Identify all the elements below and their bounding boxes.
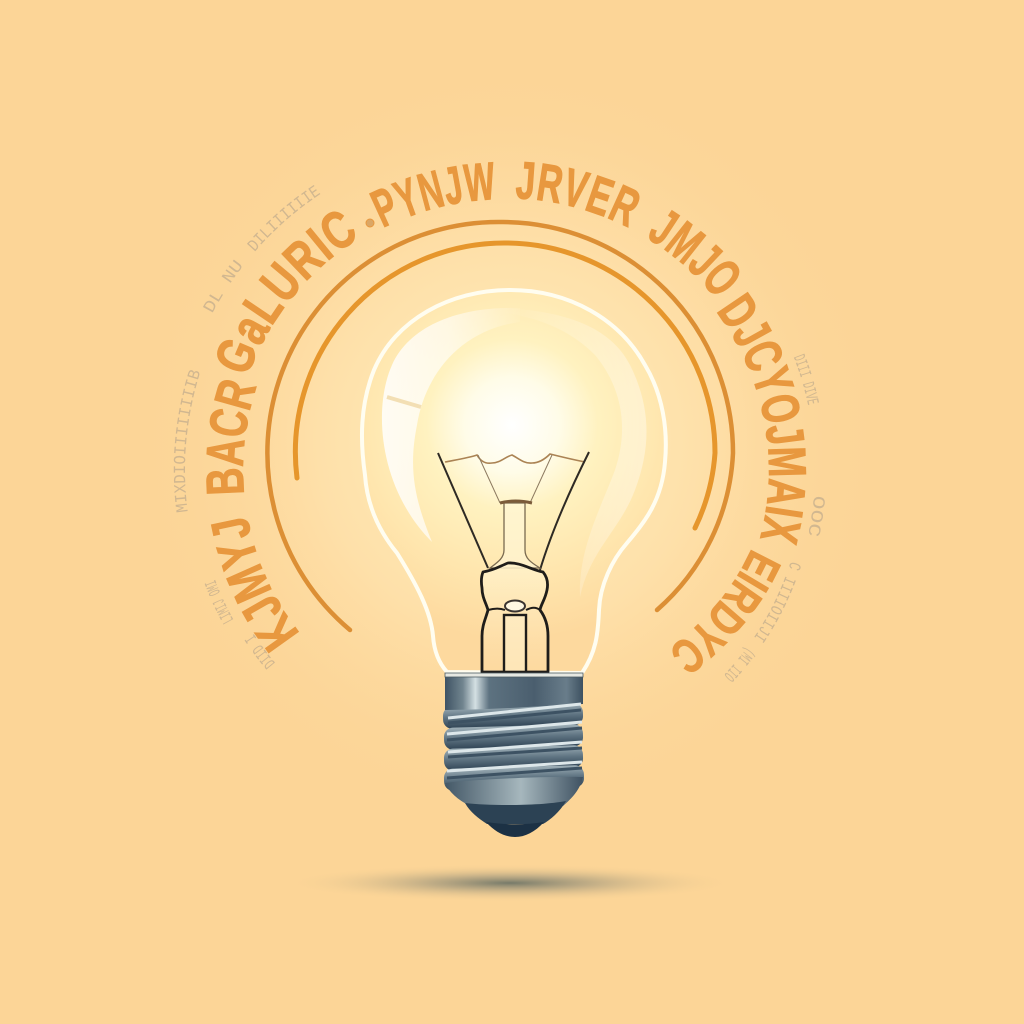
caption: upper left 1: DL NU: [203, 260, 242, 312]
caption: right lower 2: (MI IIO: [725, 647, 756, 682]
mount centre column: [504, 615, 526, 672]
lower contact: [465, 801, 566, 824]
left crescent highlight: [382, 308, 520, 542]
contact tip: [486, 822, 544, 837]
thread highlights: [447, 704, 582, 771]
caption: lower left 2: DIID I: [244, 634, 275, 670]
caption: right middle: OOC: [809, 496, 825, 536]
text: right word 3: EIRDYC: [672, 550, 782, 672]
stem disc: [500, 501, 532, 503]
glass mount: [481, 563, 548, 672]
right support wire: [540, 452, 589, 570]
thread shadows: [447, 710, 582, 778]
mount ring: [505, 600, 525, 612]
inner arc: [295, 243, 715, 528]
base thread 2: [444, 724, 583, 750]
floor shadow: [285, 864, 735, 902]
right highlight: [500, 308, 646, 597]
window reflection line: [387, 397, 421, 407]
text: left word 3: GaLURIC: [217, 212, 355, 372]
filament wire: [445, 454, 585, 463]
screw base: [443, 673, 584, 837]
text: right word 1: JMJO: [649, 210, 740, 294]
background glow: [130, 60, 890, 820]
text: top word 2: JRVER: [516, 162, 640, 228]
collar rim: [445, 673, 583, 677]
text: separator dot: [366, 219, 374, 227]
caption: right upper: DIII DIVE: [794, 354, 819, 405]
light bulb: [362, 290, 666, 837]
text: top word 1: PYNJW: [369, 162, 494, 228]
outer arc: [267, 222, 733, 630]
caption: right lower 1: C IIIIOIIJI: [754, 562, 801, 643]
caption: far left: MIXDIOIIIIIIIIB: [174, 370, 200, 512]
base thread 1: [443, 703, 583, 729]
small outer caption text: [174, 185, 825, 682]
base collar: [445, 677, 583, 710]
caption: upper left 2: DILIIIIIIE: [247, 185, 320, 252]
bulb glass: [362, 290, 666, 673]
text: left word 2: BACR: [206, 380, 257, 494]
stem tube: [490, 503, 540, 568]
mount shoulder line: [488, 608, 540, 610]
taper: [445, 777, 583, 806]
curved heading text: [206, 162, 806, 672]
text: left word 1: KJMYJ: [210, 518, 299, 654]
caption: lower left 1: LIMIJ OMI: [204, 580, 233, 624]
text: right word 2: DJCYOJMAIX: [716, 292, 806, 546]
base thread 3: [444, 745, 583, 771]
filament thin supports: [478, 455, 552, 503]
left support wire: [438, 453, 488, 568]
base thread 4: [444, 765, 584, 791]
